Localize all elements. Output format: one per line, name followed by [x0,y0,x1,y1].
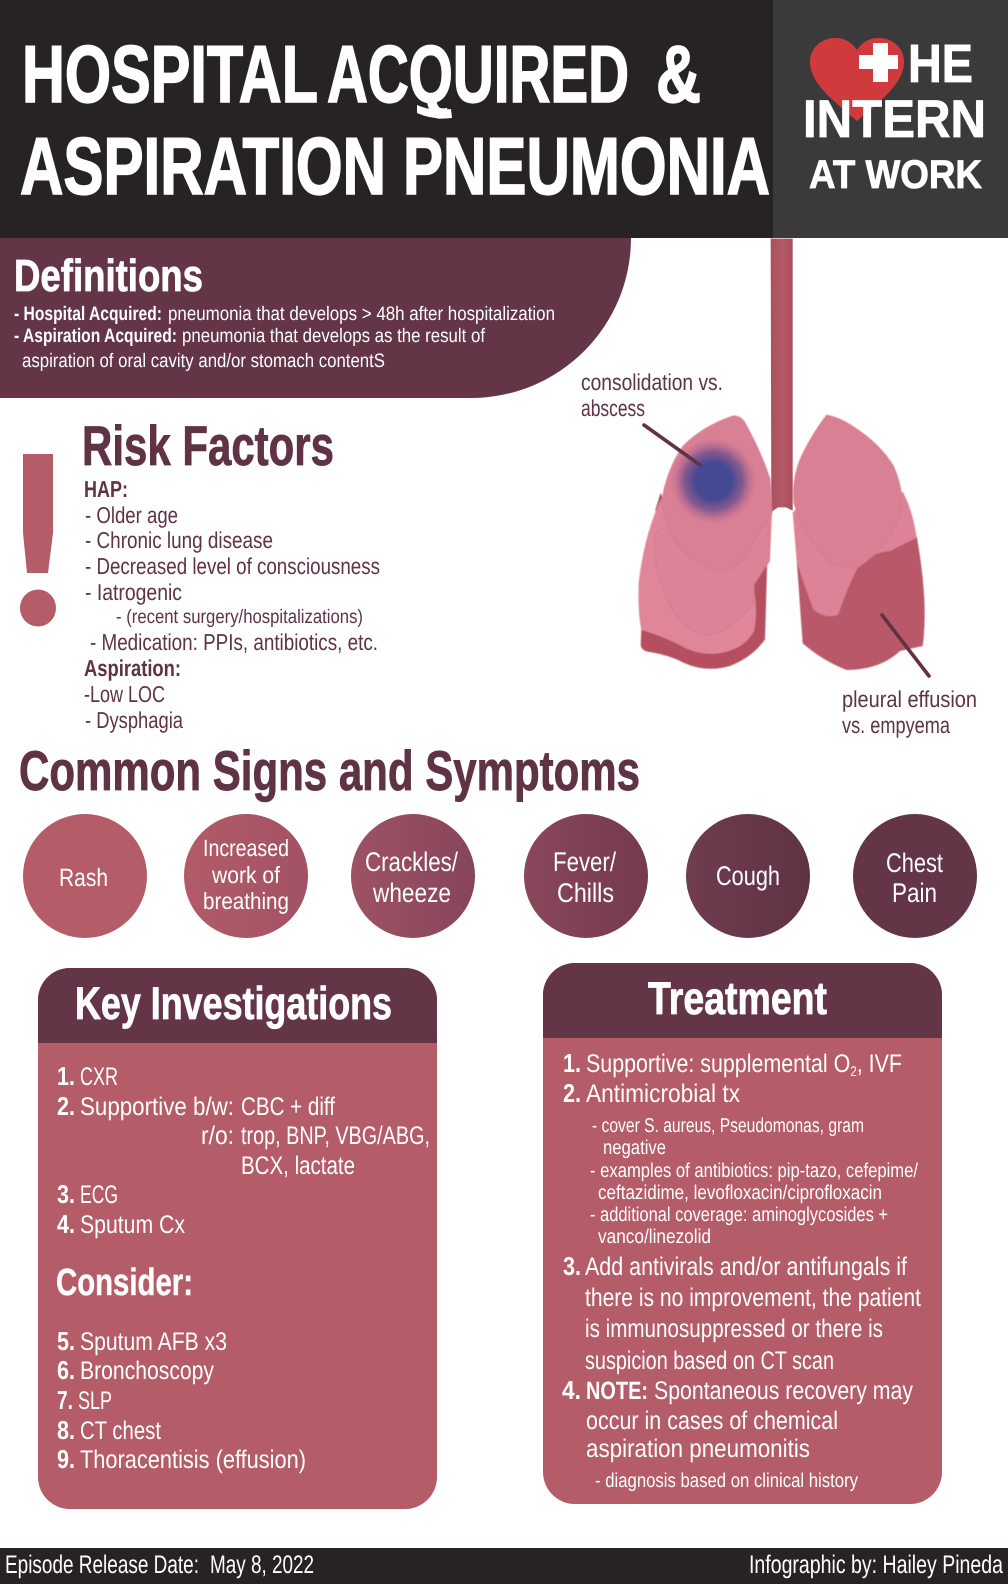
risk factor list: - Dysphagia [85,707,183,733]
risk factor list: HAP: [84,476,128,502]
investigations list: ECG [80,1181,118,1209]
symptom: fever/chills: Fever/ [553,847,616,877]
logo wordmark: AT WORK [809,153,982,197]
investigations list: BCX, lactate [241,1152,355,1180]
treatment list: occur in cases of chemical [586,1407,838,1435]
definitions text [14,303,555,372]
treatment list: Antimicrobial tx [586,1080,740,1108]
label: consolidation vs. abscess: consolidation vs. [581,369,723,395]
investigations list: CT chest [80,1417,161,1445]
symptom: fever/chills: Chills [557,878,614,908]
symptom: increased work of breathing: breathing [203,888,289,914]
investigations list: 9. [57,1444,75,1474]
panel: key investigations [38,968,437,1509]
risk factor list: - Decreased level of consciousness [85,553,380,579]
investigations list: 8. [57,1415,75,1445]
symptom: crackles/wheeze [351,814,475,938]
symptom: crackles/wheeze: Crackles/ [365,847,458,877]
left lung [638,416,772,669]
treatment list: 2 [850,1063,857,1079]
investigations list: 4. [57,1209,75,1239]
treatment list: suspicion based on CT scan [585,1347,834,1375]
treatment list: NOTE: [586,1377,648,1405]
arrow: consolidation pointer [644,425,700,465]
investigations list: r/o: [201,1122,234,1150]
title: PNEUMONIA [403,122,770,212]
definitions text: - Aspiration Acquired: [14,325,177,347]
footer: release date: Episode Release Date: [5,1551,199,1579]
treatment list: Supportive: supplemental O [586,1050,901,1078]
risk factor list: - Medication: PPIs, antibiotics, etc. [90,629,378,655]
treatment list: is immunosuppressed or there is [585,1315,883,1343]
symptom: increased work of breathing [184,814,308,938]
trachea [771,239,793,512]
treatment list: , IVF [857,1050,902,1078]
label: consolidation vs. abscess: abscess [581,395,645,421]
investigations list: 3. [57,1179,75,1209]
symptom: chest pain: Chest [886,848,943,878]
symptom: rash [23,814,147,938]
label: pleural effusion vs. empyema: pleural effusion [842,686,977,712]
risk factor list: - Iatrogenic [85,579,182,605]
investigations list: Sputum AFB x3 [80,1328,227,1356]
label: consolidation vs. abscess [581,369,723,421]
label: pleural effusion vs. empyema [842,686,977,738]
treatment list: aspiration pneumonitis [586,1435,810,1463]
symptom: chest pain [853,814,977,938]
treatment list: ceftazidime, levofloxacin/ciprofloxacin [598,1182,882,1204]
panel: definitions [0,238,631,398]
heading: definitions: Definitions [14,250,203,301]
investigations list: Sputum Cx [80,1211,185,1239]
definitions text: pneumonia that develops > 48h after hospitalization [168,303,555,325]
investigations list: SLP [78,1387,112,1415]
treatment list: - diagnosis based on clinical history [595,1470,858,1492]
investigations list: CXR [80,1063,118,1091]
heading: risk factors: Risk Factors [82,414,334,477]
consolidation spot [670,438,757,524]
arrow: effusion pointer [882,615,929,676]
investigations list: Bronchoscopy [80,1357,214,1385]
treatment list: negative [603,1137,666,1159]
symptom: increased work of breathing: work of [211,862,280,888]
investigations list [57,1061,430,1474]
risk factor list: -Low LOC [84,681,165,707]
symptom: chest pain: Pain [892,878,937,908]
investigations list: 5. [57,1326,75,1356]
symptom: crackles/wheeze: wheeze [372,878,451,908]
investigations list: Thoracentisis (effusion) [80,1446,306,1474]
treatment list: 2. [563,1078,581,1108]
logo wordmark [803,34,986,197]
investigations list: Supportive b/w: [80,1093,234,1121]
investigations list: trop, BNP, VBG/ABG, [241,1122,430,1150]
title: HOSPITAL [22,30,318,120]
heading: common signs and symptoms: Common Signs and Symptoms [19,739,640,802]
footer bar [0,1548,1008,1584]
treatment list: - additional coverage: aminoglycosides + [590,1204,888,1226]
treatment list [562,1048,921,1492]
title: & [656,30,701,120]
logo wordmark: HE [908,34,973,94]
definitions text: aspiration of oral cavity and/or stomach contentS [22,350,385,372]
treatment list: Spontaneous recovery may [654,1377,913,1405]
symptom: rash: Rash [59,864,108,892]
heading: treatment: Treatment [648,972,827,1024]
symptom circles [23,814,977,938]
header band [0,0,1008,238]
treatment list: vanco/linezolid [598,1226,711,1248]
risk factor list: - Older age [85,502,178,528]
treatment list: 3. [563,1251,581,1281]
investigations list: CBC + diff [241,1093,336,1121]
icon: heart with cross [810,38,904,121]
treatment list: there is no improvement, the patient [585,1284,921,1312]
lung illustration [638,239,925,670]
investigations list: 2. [57,1091,75,1121]
symptom: cough [686,814,810,938]
right lung [793,415,925,670]
symptom: cough: Cough [716,861,780,891]
risk factor list: - Chronic lung disease [85,527,273,553]
title [20,30,770,212]
panel: treatment [543,963,942,1504]
investigations list: 6. [57,1355,75,1385]
investigations list: 7. [57,1385,73,1415]
logo wordmark: INTERN [803,90,986,149]
risk factor list: - (recent surgery/hospitalizations) [116,606,363,628]
symptom: fever/chills [524,814,648,938]
definitions text: - Hospital Acquired: [14,303,162,325]
treatment list: 4. [562,1375,581,1405]
treatment list: Add antivirals and/or antifungals if [585,1253,908,1281]
risk factor list [84,476,380,733]
footer: release date: May 8, 2022 [210,1551,314,1579]
investigations list: 1. [57,1061,75,1091]
subheading: consider: Consider: [56,1262,193,1304]
symptom: increased work of breathing: Increased [203,835,289,861]
treatment list: - cover S. aureus, Pseudomonas, gram [592,1115,864,1137]
heading: key investigations: Key Investigations [75,977,392,1029]
panel: risk factors [82,414,380,733]
definitions text: pneumonia that develops as the result of [182,325,485,347]
logo: The Intern at Work [773,0,1008,238]
treatment list: 1. [563,1048,581,1078]
label: pleural effusion vs. empyema: vs. empyema [842,712,950,738]
treatment list: - examples of antibiotics: pip-tazo, cefepime/ [590,1160,918,1182]
title: ACQUIRED [327,30,629,120]
icon: exclamation mark [20,454,56,626]
title: ASPIRATION [20,122,386,212]
risk factor list: Aspiration: [84,655,181,681]
